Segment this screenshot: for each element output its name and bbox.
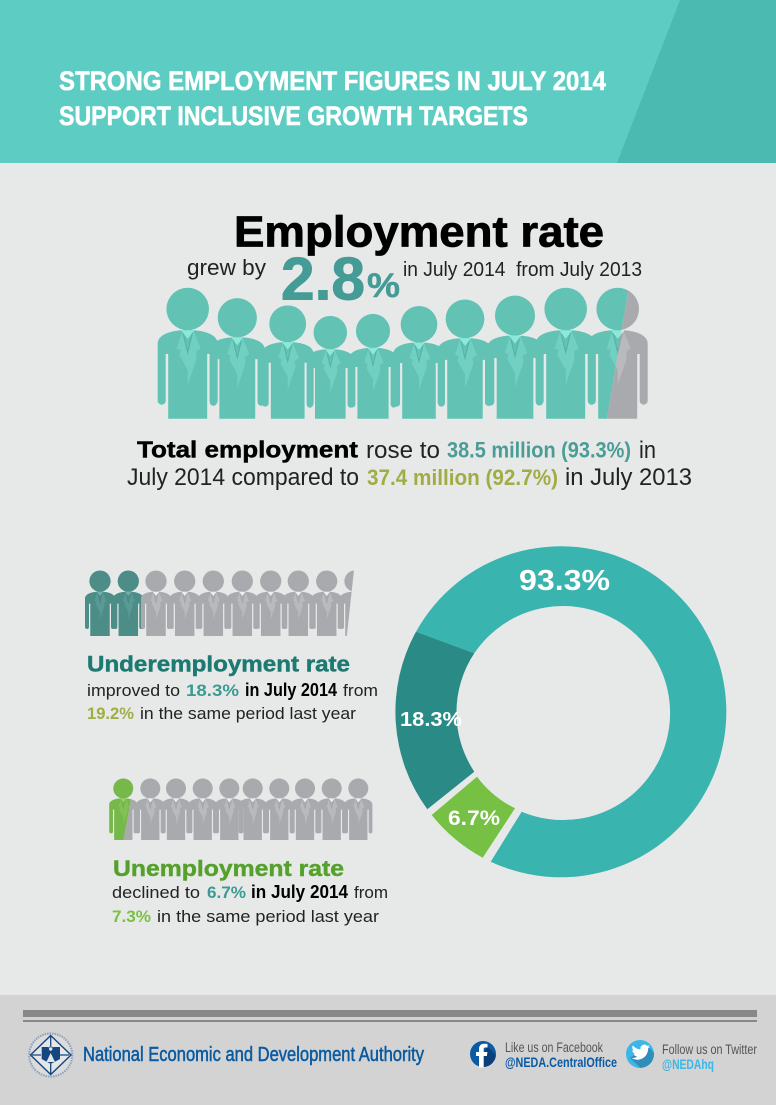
facebook text: Like us on Facebook: [505, 1040, 603, 1055]
label: 6.7%: 6.7%: [448, 807, 500, 830]
text block: total employment: in: [639, 437, 656, 464]
heading: employment rate: %: [367, 267, 400, 305]
people row: underemployment: [85, 570, 370, 636]
twitter text: @NEDAhq: [662, 1057, 714, 1072]
label: 18.3%: 18.3%: [400, 708, 462, 731]
text block: underemployment: in July 2014: [245, 680, 337, 700]
segment: unemployment 6.7%: [432, 777, 515, 858]
title: STRONG EMPLOYMENT FIGURES IN JULY 2014: [59, 66, 606, 96]
text block: total employment: Total employment: [137, 436, 358, 462]
text block: underemployment: from: [343, 681, 378, 700]
text block: total employment: in July 2013: [565, 464, 692, 491]
text block: unemployment: from: [354, 883, 388, 902]
icon: NEDA seal: [29, 1034, 72, 1076]
people row: employment rate: [158, 288, 648, 419]
heading: employment rate: in July 2014 from July 2013: [403, 259, 642, 281]
text block: total employment: [127, 436, 692, 491]
text block: total employment: rose to: [366, 437, 440, 464]
icon: twitter: [626, 1040, 654, 1068]
organisation name: National Economic and Development Authority: [83, 1044, 424, 1066]
text block: underemployment: [87, 652, 378, 723]
heading: employment rate: grew by: [187, 255, 266, 280]
title: SUPPORT INCLUSIVE GROWTH TARGETS: [59, 101, 528, 131]
text block: underemployment: 19.2%: [87, 704, 134, 723]
text block: unemployment: in the same period last year: [157, 907, 379, 926]
heading: employment rate: Employment rate: [234, 208, 604, 256]
text block: underemployment: 18.3%: [186, 681, 239, 700]
footer: [0, 995, 776, 1105]
icon: facebook: [470, 1041, 496, 1068]
text block: total employment: 37.4 million (92.7%): [367, 465, 558, 490]
donut chart: [395, 546, 726, 877]
facebook text: [505, 1040, 617, 1070]
heading: employment rate: 2.8: [281, 246, 365, 312]
heading: underemployment rate: Underemployment rate: [87, 652, 350, 676]
people row: unemployment: [109, 778, 372, 840]
facebook text: @NEDA.CentralOffice: [505, 1055, 617, 1070]
text block: underemployment: improved to: [87, 681, 180, 700]
text block: underemployment: in the same period last year: [140, 704, 356, 723]
title: [59, 66, 606, 131]
twitter text: [662, 1042, 757, 1072]
text block: unemployment: [112, 856, 388, 926]
header banner: [0, 0, 776, 163]
segment: employment 93.3%: [416, 546, 726, 877]
text block: unemployment: 7.3%: [112, 907, 151, 926]
label: 93.3%: 93.3%: [519, 565, 610, 597]
text block: unemployment: declined to: [112, 883, 200, 902]
text block: unemployment: 6.7%: [207, 883, 246, 902]
heading: unemployment rate: Unemployment rate: [113, 856, 344, 881]
text block: unemployment: in July 2014: [251, 882, 348, 902]
segment: underemployment 18.3%: [395, 632, 474, 809]
heading: employment rate: [187, 208, 642, 312]
text block: total employment: July 2014 compared to: [127, 464, 359, 491]
text block: total employment: 38.5 million (93.3%): [447, 438, 631, 462]
